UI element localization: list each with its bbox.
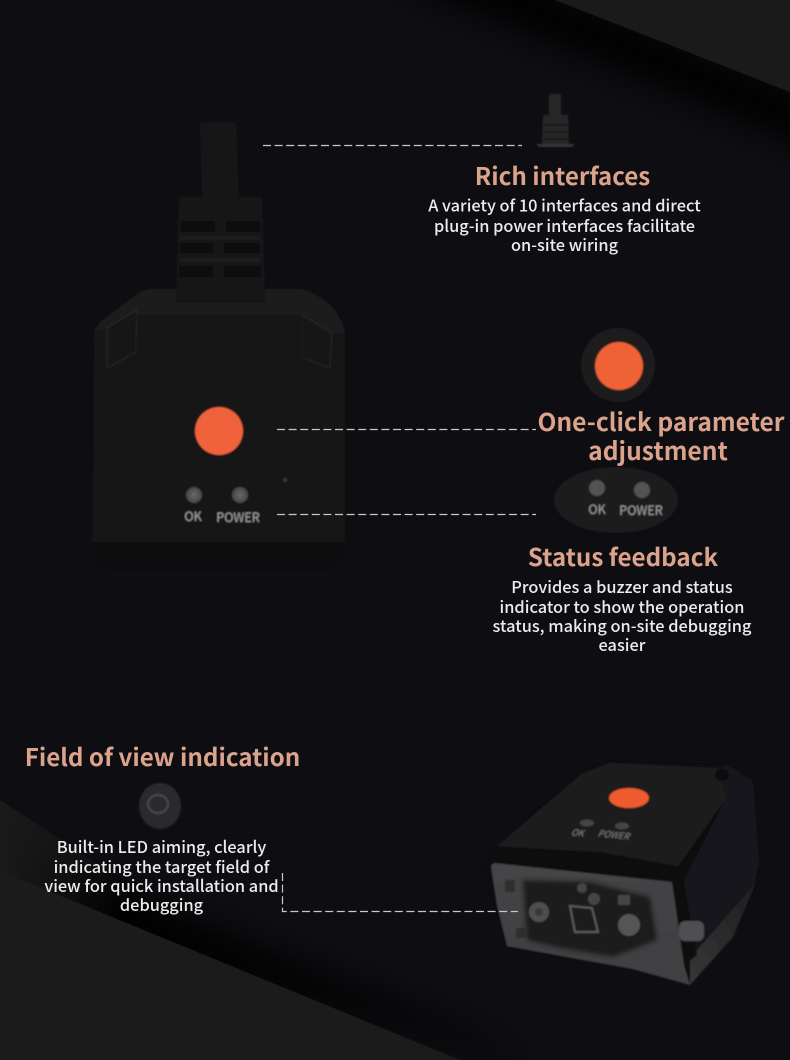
icon: status indicators thumbnail: OK xyxy=(588,499,607,518)
top face xyxy=(497,763,727,866)
top leds and labels: POWER xyxy=(596,826,634,842)
side face xyxy=(684,765,759,950)
status leds xyxy=(184,478,287,526)
text: status feedback description: status, making on-site debugging xyxy=(493,613,752,637)
outer body xyxy=(483,761,759,985)
leader line: button xyxy=(277,428,536,430)
heading: rich interfaces: Rich interfaces xyxy=(475,157,650,192)
text: rich interfaces description: plug-in power interfaces facilitate xyxy=(434,213,695,237)
leader line: status xyxy=(277,514,536,516)
text: field of view description: indicating the target field of xyxy=(54,854,271,878)
top leds and labels xyxy=(569,820,634,842)
status leds: OK xyxy=(184,506,203,525)
button xyxy=(195,407,243,455)
text: status feedback description: Provides a buzzer and status xyxy=(511,574,733,598)
text: field of view description: Built-in LED aiming, clearly xyxy=(57,834,266,858)
lower side lip xyxy=(690,882,756,985)
lens details xyxy=(505,880,704,941)
heading: status feedback: Status feedback xyxy=(528,538,718,573)
leader line: interfaces xyxy=(263,144,522,146)
text: rich interfaces description: on-site wiring xyxy=(511,232,619,256)
heading: one-click parameter adjustment: adjustment xyxy=(588,432,728,468)
heading: one-click parameter adjustment: One-click parameter xyxy=(537,403,785,439)
text: status feedback description: easier xyxy=(599,632,646,656)
rear knob xyxy=(715,769,729,781)
heading: field of view indication: Field of view indication xyxy=(25,738,300,773)
text: field of view description: view for quick installation and xyxy=(44,873,279,897)
top leds and labels: OK xyxy=(569,825,588,839)
text: status feedback description: indicator to show the operation xyxy=(500,594,744,618)
icon: status indicators thumbnail: POWER xyxy=(619,500,663,519)
device body xyxy=(92,289,345,568)
front lens face xyxy=(491,863,690,985)
leader line: field of view xyxy=(282,873,518,912)
top button xyxy=(609,788,649,808)
icon: status indicators thumbnail xyxy=(554,467,678,533)
gasket strip xyxy=(672,878,697,964)
cable xyxy=(200,122,239,197)
front inner dark area xyxy=(523,880,657,957)
status leds: POWER xyxy=(216,507,260,526)
device perspective view xyxy=(483,761,759,985)
connector xyxy=(176,197,265,302)
icon: button thumbnail xyxy=(581,328,655,402)
icon: connector thumbnail xyxy=(536,94,575,147)
text: rich interfaces description: A variety of 10 interfaces and direct xyxy=(428,192,701,216)
device front view with cable xyxy=(92,122,345,568)
text: field of view description: debugging xyxy=(120,892,204,916)
icon: LED aiming thumbnail xyxy=(139,783,181,829)
